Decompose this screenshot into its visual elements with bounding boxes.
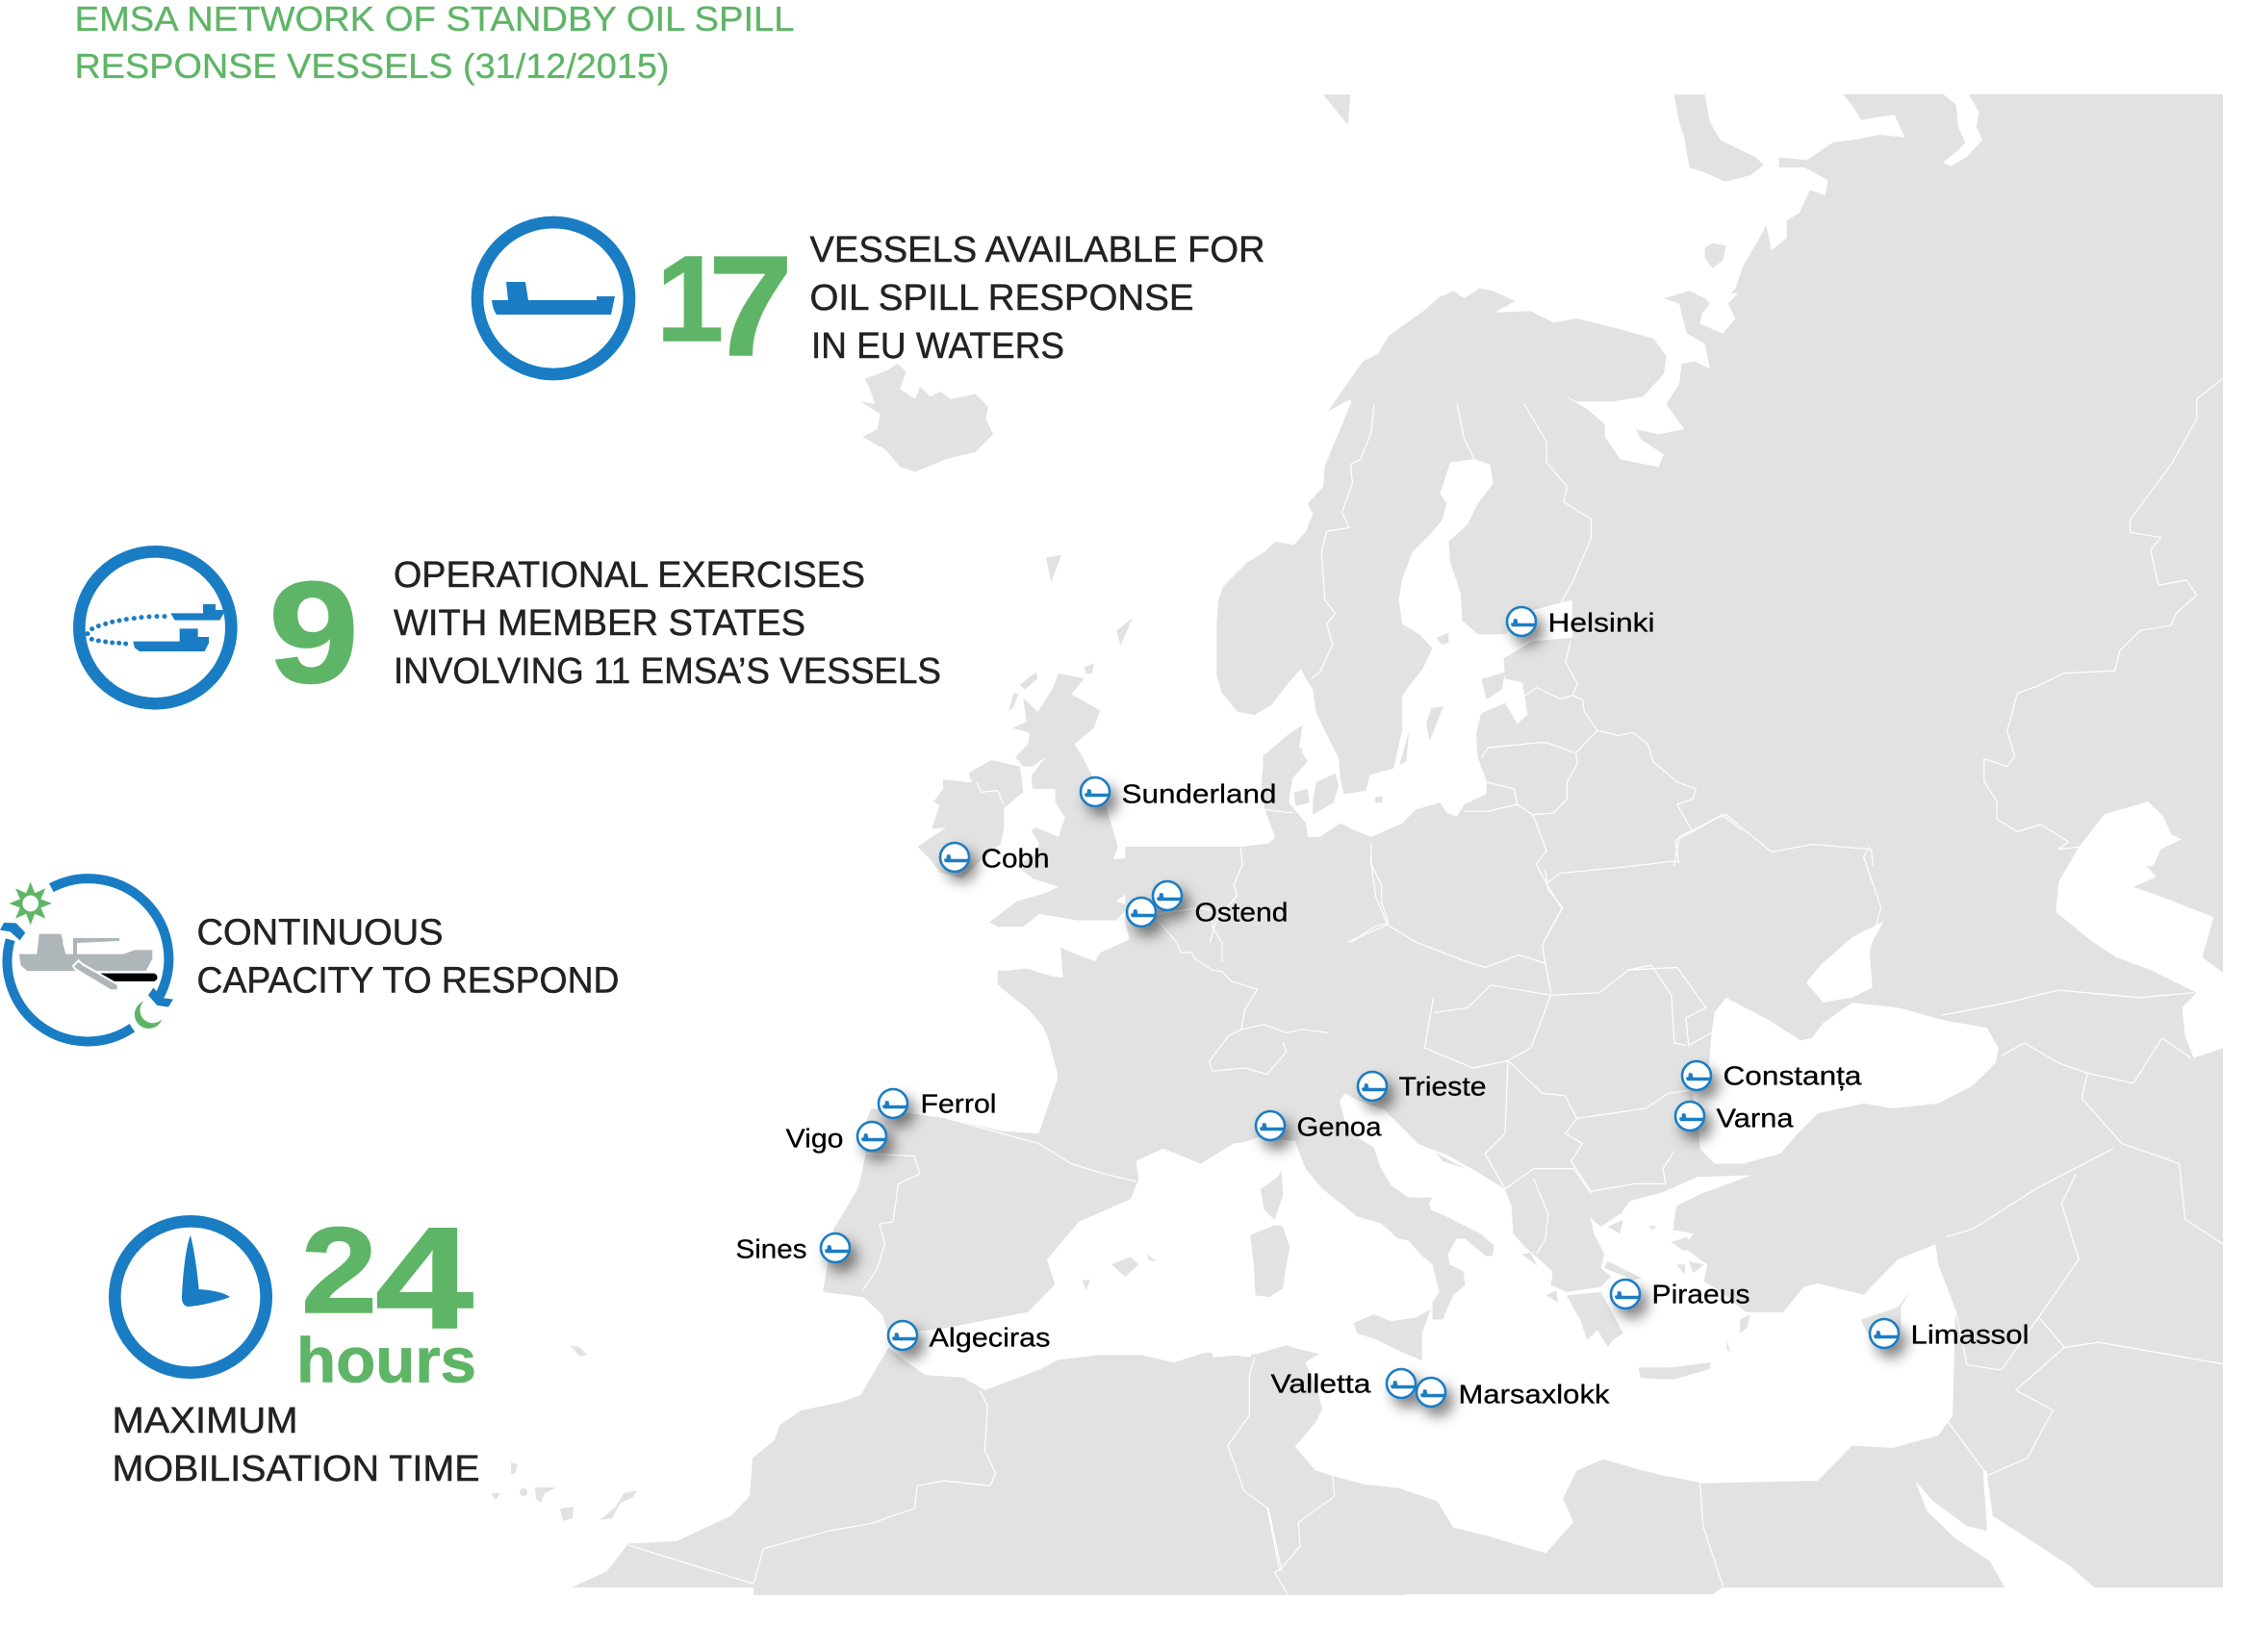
stat number: 17 xyxy=(656,227,793,386)
port markers xyxy=(821,607,1899,1407)
port labels: Sunderland xyxy=(1122,779,1276,808)
stat number: 24: 2 xyxy=(301,1202,377,1338)
stat number: 24 xyxy=(301,1197,473,1359)
stat number: 17: 1 xyxy=(656,231,724,367)
port labels: Algeciras xyxy=(930,1322,1051,1353)
text: vessels available xyxy=(810,230,1264,367)
icon: continuous day and night capacity xyxy=(0,878,173,1041)
port labels: Varna xyxy=(1717,1103,1794,1133)
stat number: 24: 4 xyxy=(375,1197,473,1359)
stat number: 17: 7 xyxy=(708,227,793,386)
port labels: Genoa xyxy=(1297,1112,1382,1141)
text: mobilisation time: MAXIMUM xyxy=(112,1401,298,1441)
port labels: Piraeus xyxy=(1651,1280,1749,1309)
text: mobilisation time xyxy=(112,1401,479,1489)
port labels: Constanța xyxy=(1723,1060,1862,1091)
text: continuous capacity xyxy=(196,912,620,1001)
port labels xyxy=(735,608,2029,1409)
port labels: Limassol xyxy=(1911,1320,2029,1349)
land masses xyxy=(491,94,2223,1595)
port labels: Ostend xyxy=(1195,897,1288,928)
text: operational exercises xyxy=(394,555,941,692)
icon: clock xyxy=(115,1221,267,1373)
title xyxy=(75,0,795,86)
stat unit: hours: hours xyxy=(296,1324,476,1395)
port labels: Vigo xyxy=(785,1124,843,1153)
text: operational exercises: INVOLVING 11 EMSA’S VESSELS xyxy=(394,651,941,692)
port labels: Helsinki xyxy=(1547,608,1655,637)
text: vessels available: VESSELS AVAILABLE FOR xyxy=(810,230,1264,270)
port labels: Cobh xyxy=(982,843,1049,874)
stat number: 9: 9 xyxy=(268,551,359,713)
text: operational exercises: OPERATIONAL EXERCISES xyxy=(394,555,865,596)
port labels: Trieste xyxy=(1399,1072,1486,1101)
icon: two ships with exercise route xyxy=(79,551,231,703)
port labels: Sines xyxy=(735,1233,806,1264)
country borders xyxy=(628,379,2223,1595)
port labels: Ferrol xyxy=(920,1089,997,1118)
port labels: Marsaxlokk xyxy=(1459,1380,1611,1409)
sea areas xyxy=(1213,77,2223,1596)
text: vessels available: IN EU WATERS xyxy=(811,326,1064,367)
title: EMSA NETWORK OF STANDBY OIL SPILL xyxy=(75,0,795,38)
title: RESPONSE VESSELS (31/12/2015) xyxy=(75,46,670,86)
text: continuous capacity: CONTINUOUS xyxy=(196,912,443,953)
text: operational exercises: WITH MEMBER STATES xyxy=(394,603,805,644)
icon: ship in circle xyxy=(477,222,629,374)
port labels: Valletta xyxy=(1270,1368,1371,1399)
islands and peninsulas over the seas xyxy=(1082,94,1909,1380)
text: mobilisation time: MOBILISATION TIME xyxy=(112,1449,479,1489)
text: vessels available: OIL SPILL RESPONSE xyxy=(810,278,1193,318)
map of Europe xyxy=(491,77,2223,1596)
text: continuous capacity: CAPACITY TO RESPOND xyxy=(196,960,620,1001)
